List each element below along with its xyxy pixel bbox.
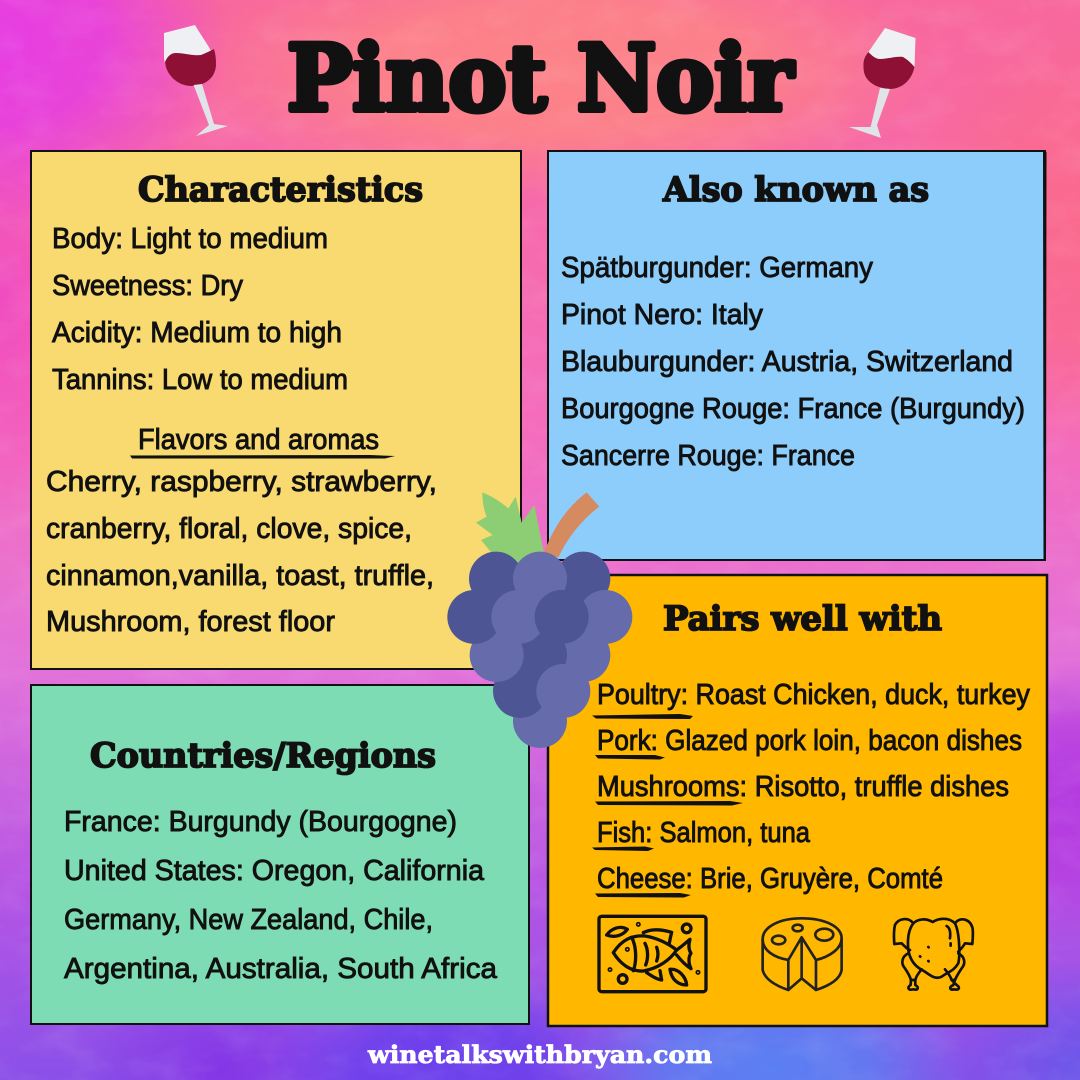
text block: flavors list: Mushroom, forest floor <box>46 606 335 638</box>
text block: flavors list: cranberry, floral, clove, spice, <box>46 513 412 545</box>
icon: grape cluster <box>447 492 632 748</box>
text block: flavors list <box>46 466 437 638</box>
panel: pairs well with <box>548 575 1047 1026</box>
title: Pinot Noir <box>287 26 794 132</box>
grapes <box>447 552 632 748</box>
panel: also known as <box>548 151 1046 560</box>
panel: characteristics <box>31 151 521 669</box>
icon: chicken <box>894 919 973 990</box>
panel: countries and regions <box>31 685 529 1024</box>
text block: characteristics list <box>52 223 348 396</box>
text block: pairings list: Poultry: Roast Chicken, duck, turkey <box>597 679 1030 711</box>
text block: regions list: United States: Oregon, California <box>64 855 485 887</box>
text block: pairings list: Fish: Salmon, tuna <box>597 817 811 849</box>
icon: fish <box>599 916 706 992</box>
text block: flavors list: cinnamon,vanilla, toast, truffle, <box>46 560 434 592</box>
text block: pairings list: Mushrooms: Risotto, truffle dishes <box>597 771 1009 803</box>
heading: pairs well with: Pairs well with <box>663 599 942 639</box>
text block: synonyms list <box>561 252 1025 472</box>
text block: pairings list <box>592 679 1030 898</box>
text block: regions list <box>64 806 498 985</box>
icon: cheese <box>763 918 842 990</box>
text block: regions list: France: Burgundy (Bourgogne) <box>64 806 457 838</box>
text block: characteristics list: Sweetness: Dry <box>52 270 243 302</box>
text block: flavors list: Cherry, raspberry, strawberry, <box>46 466 437 498</box>
text block: pairings list: Pork: Glazed pork loin, bacon dishes <box>597 725 1022 757</box>
footer website: winetalkswithbryan.com <box>367 1040 712 1069</box>
icon: wine glass right <box>849 28 916 138</box>
text block: regions list: Argentina, Australia, South Africa <box>64 953 498 985</box>
text block: characteristics list: Body: Light to medium <box>52 223 328 255</box>
text block: synonyms list: Blauburgunder: Austria, Switzerland <box>561 346 1013 378</box>
heading: countries/regions: Countries/Regions <box>90 736 436 776</box>
text block: characteristics list: Tannins: Low to medium <box>52 364 348 396</box>
text block: synonyms list: Bourgogne Rouge: France (Burgundy) <box>561 393 1025 425</box>
text block: synonyms list: Sancerre Rouge: France <box>561 440 855 472</box>
subheading: flavors and aromas: Flavors and aromas <box>138 424 379 456</box>
text block: synonyms list: Pinot Nero: Italy <box>561 299 763 331</box>
text block: synonyms list: Spätburgunder: Germany <box>561 252 873 284</box>
leaf <box>476 492 544 563</box>
icon: wine glass left <box>164 25 228 136</box>
text block: pairings list: Cheese: Brie, Gruyère, Comté <box>597 863 943 895</box>
text block: regions list: Germany, New Zealand, Chile, <box>64 904 433 936</box>
heading: characteristics: Characteristics <box>138 170 423 210</box>
heading: also known as: Also known as <box>662 170 929 210</box>
stem <box>544 492 599 557</box>
text block: characteristics list: Acidity: Medium to high <box>52 317 342 349</box>
